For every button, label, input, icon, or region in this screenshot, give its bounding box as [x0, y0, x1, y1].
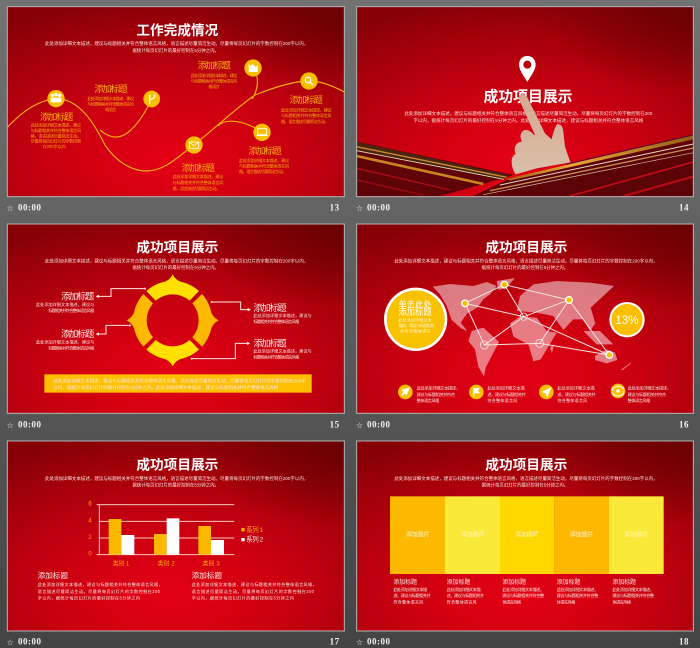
text block: upper left	[36, 290, 95, 313]
text block: column 3	[502, 578, 544, 604]
text block: item 3: 此处添加详细文本描述，建议	[191, 72, 238, 78]
text block: column 5: 建议与标题相关并符合整	[612, 592, 654, 598]
text block: item 2	[87, 83, 135, 112]
callout circle: 添加标题	[398, 307, 432, 317]
footer: ☆	[7, 204, 14, 213]
icon: refresh eye	[611, 384, 625, 398]
text block: item 1: 添加标题	[40, 111, 73, 122]
network lines	[465, 285, 609, 355]
callout circle: 单击此处	[398, 299, 432, 309]
text block: item 5: 与标题相关并符合整体语言风	[239, 162, 290, 168]
text block: column 2: 添加标题	[447, 578, 470, 586]
image placeholder blocks: 添加图片	[515, 531, 539, 539]
text block: item 1: 此处添加详细文本描述，建议	[31, 121, 82, 127]
text block: feature 4: 整体语言风格	[628, 397, 651, 403]
icon: flag	[469, 385, 484, 399]
text block: feature 1: 建议与标题相关并符合	[417, 391, 456, 397]
panel: slide 14 hand pointing	[356, 7, 693, 213]
text block: column 1: 符合整体语言风	[393, 598, 424, 604]
text block: item 1	[31, 111, 82, 149]
bar chart: 类别 1	[113, 559, 130, 567]
intro text: 据统计每页幻灯片的最好控制在5分钟之内。	[132, 264, 219, 271]
text block: column 4: 体语言风格	[557, 598, 576, 604]
text block: column 1: 述，建议与标题相关并	[393, 592, 431, 598]
bar chart: 2	[88, 535, 92, 541]
footer: 14	[679, 202, 689, 212]
text block: item 6: 添加标题	[182, 162, 215, 173]
chart legend: 系列 1	[246, 525, 264, 534]
text block: upper right	[253, 302, 312, 324]
footer	[7, 420, 340, 430]
intro text: 字以内，据统计每页幻灯片的最好控制在5分钟之内。此处添加详细文本描述，建议与标题相关并符合整体语言风格	[413, 117, 644, 124]
text block: item 4: 此处添加详细文本描述，建议	[281, 106, 332, 112]
footer: 00:00	[367, 637, 390, 647]
text block: right: 添加标题	[192, 570, 222, 580]
icon: factory	[244, 59, 262, 77]
text block: column 1: 添加标题	[393, 578, 417, 586]
title: 成功项目展示	[136, 456, 218, 472]
text block: feature 4: 此处添加详细文本描述，	[628, 384, 671, 390]
footer: 17	[330, 637, 340, 647]
panel: slide 16 world map	[356, 224, 693, 430]
image placeholder blocks: 添加图片	[570, 531, 594, 539]
bar chart: 6	[88, 502, 92, 508]
text block: column 2: 符合整体语言风	[447, 598, 477, 604]
text block: column 3: 体语言风格	[502, 598, 522, 604]
intro text: 据统计每页幻灯片的最好控制在5分钟之内。	[482, 481, 568, 488]
text block: feature 3: 此处添加详细文本描	[557, 384, 595, 390]
text block: lower right: 添加标题	[253, 337, 287, 348]
callout bar: 此处添加详细文本描述，建议与标题相关并符合整体语言风格，语言描述尽量简洁生动。尽量将每页幻灯片的字数控制在200字	[53, 377, 306, 384]
intro text	[404, 110, 653, 124]
bar chart: 类别 3	[202, 559, 220, 567]
text block: item 4: 与标题相关并符合整体语言风	[281, 112, 332, 118]
text block: item 6: 格，语言描述尽量简洁生动。	[173, 185, 220, 191]
world map	[433, 278, 632, 377]
text block: feature 2: 述，建议与标题相关并	[487, 391, 526, 397]
footer: 00:00	[367, 202, 390, 212]
text block: lower left: 标题相关并符合整体语言风格	[48, 344, 95, 350]
icon: mail	[185, 136, 203, 154]
callout bar: 以内，据统计每页幻灯片的最好控制在5分钟之内。此处添加详细文本描述，建议与标题相关并符合整体语言风格	[53, 384, 279, 391]
icon: branch	[143, 91, 160, 107]
image placeholder blocks	[390, 496, 664, 574]
text block: item 2: 格语言	[105, 106, 116, 112]
text block: column 4: 此处添加详细文本描述，	[557, 586, 598, 592]
text block: column 5: 此处添加详细文本描述，	[612, 586, 654, 592]
footer: 00:00	[18, 202, 41, 212]
callout circle: 此处添加详细文本	[398, 316, 432, 322]
text block: item 1: 与标题相关并符合整体语言风	[31, 127, 82, 133]
text block: item 4: 格，语言描述尽量简洁生动。	[281, 118, 328, 124]
footer	[356, 202, 689, 213]
panel: slide 17 bar chart	[7, 441, 344, 647]
title: 成功项目展示	[484, 88, 573, 106]
text block: left: 添加标题	[38, 570, 68, 580]
icon: search	[300, 72, 318, 90]
footer: 15	[330, 420, 340, 430]
curved timeline	[7, 68, 344, 171]
text block: column 3: 建议与标题相关并符合整	[502, 592, 544, 598]
footer	[7, 637, 340, 647]
text block: upper right: 标题相关并符合整体语言风格	[253, 318, 300, 324]
intro text: 此处添加详细文本描述，建议与标题相关并符合整体语言风格，语言描述尽量简洁生动。尽量将每页幻灯片的字数控制在200字以内，	[45, 475, 308, 482]
text block: feature 2	[487, 384, 526, 403]
text block: feature 1: 此处添加详细文本描述，	[417, 384, 460, 390]
title: 成功项目展示	[485, 456, 567, 472]
intro text	[45, 40, 308, 54]
bar chart: 4	[88, 518, 92, 524]
text block: upper left: 添加标题	[61, 290, 94, 301]
intro text: 此处添加详细文本描述，建议与标题相关并符合整体语言风格，语言描述尽量简洁生动。尽量将每页幻灯片的字数控制在200字以内，	[45, 40, 308, 47]
text block: lower right: 标题相关并符合整体语言风格	[253, 353, 300, 359]
text block: item 5: 格，语言描述尽量简洁生动。	[239, 168, 286, 174]
connector arrows	[98, 289, 249, 359]
text block: item 3: 添加标题	[198, 60, 231, 71]
text block: feature 2: 符合整体语言风	[487, 397, 518, 403]
intro text: 据统计每页幻灯片的最好控制在5分钟之内。	[132, 47, 219, 54]
footer: ☆	[356, 421, 363, 430]
text block: column 5	[612, 578, 654, 604]
text block: item 5: 添加标题	[248, 145, 282, 156]
text block: upper left: 此处添加详细文本描述，建议与	[36, 301, 94, 307]
right ribbon	[473, 135, 693, 196]
text block: lower left: 此处添加详细文本描述，建议与	[36, 338, 94, 344]
text block: item 1: 在200字以内	[43, 143, 66, 149]
text block: right: 字以内，据统计每页幻灯片的最好控制在5分钟之内	[192, 594, 294, 600]
text block: column 4	[557, 578, 598, 604]
text block: column 2: 述，建议与标题相关并	[447, 592, 484, 598]
icon: paper plane	[539, 385, 554, 399]
footer	[356, 637, 689, 647]
image placeholder blocks: 添加图片	[461, 531, 485, 539]
text block: item 1: 尽量将每页幻灯片的字数控制	[31, 137, 81, 143]
text block: feature 3: 符合整体语言风	[557, 397, 588, 403]
text block: feature 3: 述，建议与标题相关并	[557, 391, 596, 397]
text block: item 6: 与标题相关并符合整体语言风	[173, 179, 224, 185]
text block: feature 1: 整体语言风格	[417, 397, 440, 403]
text block: column 3: 此处添加详细文本描述，	[502, 586, 544, 592]
text block: left: 此处添加详细文本描述，建议与标题相关并符合整体语言风格，	[38, 581, 163, 587]
footer: 18	[679, 637, 689, 647]
text block: column 5: 体语言风格	[612, 598, 632, 604]
text block: item 6: 此处添加详细文本描述，建议	[173, 173, 224, 179]
text block: column 3: 添加标题	[502, 578, 526, 586]
text block: column 1: 此处添加详细文本描	[393, 586, 427, 592]
text block: right: 此处添加详细文本描述，建议与标题相关并符合整体语言风格，	[192, 581, 317, 587]
footer: 13	[330, 202, 340, 212]
text block: item 2: 此处添加详细文本描述，建议	[87, 95, 135, 101]
panel: slide 13 work completion curve	[7, 7, 344, 213]
bar chart	[88, 502, 234, 567]
intro text: 此处添加详细文本描述，建议与标题相关并符合整体语言风格，语言描述尽量简洁生动。尽量将每页幻灯片的字数控制在200字以内，	[45, 257, 308, 264]
text block: feature 4	[628, 384, 671, 403]
ring chart	[127, 274, 219, 366]
intro text: 此处添加详细文本描述，建议与标题相关并符合整体语言风格，语言描述尽量简洁生动。尽量将每页幻灯片的字数控制在200字以内，	[394, 257, 658, 264]
intro text	[394, 257, 658, 271]
title: 成功项目展示	[485, 239, 567, 255]
text block: column 2: 此处添加详细文本描	[447, 586, 481, 592]
text block: lower left	[36, 328, 95, 350]
panel: slide 15 ring diagram	[7, 224, 344, 430]
text block: feature 3	[557, 384, 596, 403]
footer	[356, 420, 689, 430]
text block: item 3: 格语言	[208, 83, 220, 89]
text block: item 1: 格，语言描述尽量简洁生动。	[31, 132, 81, 138]
text block: left: 语言描述尽量简洁生动。尽量将每页幻灯片的字数控制在200	[38, 588, 161, 594]
text block: upper right: 添加标题	[253, 302, 287, 313]
text block: right	[192, 570, 317, 600]
icon: rocket	[398, 385, 413, 399]
left ribbon	[357, 142, 513, 196]
text block: upper left: 标题相关并符合整体语言风格	[48, 307, 95, 313]
image placeholder blocks: 添加图片	[624, 531, 648, 539]
text block: lower right: 此处添加详细文本描述，建议与	[253, 347, 312, 353]
bar chart: 类别 2	[157, 559, 175, 567]
chart legend	[241, 525, 264, 543]
text block: column 4: 添加标题	[557, 578, 580, 586]
text block: column 2	[447, 578, 484, 604]
footer: 16	[679, 420, 689, 430]
text block: item 4	[281, 94, 332, 124]
intro text: 据统计每页幻灯片的最好控制在5分钟之内。	[132, 481, 219, 488]
intro text	[45, 475, 308, 488]
intro text: 据统计每页幻灯片的最好控制在5分钟之内。	[482, 264, 568, 271]
text block: item 5	[239, 145, 290, 174]
text block: column 5: 添加标题	[612, 578, 636, 586]
footer: ☆	[7, 638, 14, 647]
hand illustration	[512, 94, 570, 174]
percent badge: 13%	[615, 314, 639, 327]
text block: item 6	[173, 162, 224, 191]
title: 成功项目展示	[136, 239, 218, 255]
title: 工作完成情况	[136, 22, 219, 38]
text block: left	[38, 570, 163, 600]
text block: item 2: 与标题相关并符合整体语言风	[87, 100, 135, 106]
panel: slide 18 image placeholders	[356, 441, 693, 647]
text block: feature 2: 此处添加详细文本描	[487, 384, 525, 390]
footer: ☆	[7, 421, 14, 430]
text block: lower right	[253, 337, 312, 359]
icon: laptop	[253, 124, 271, 141]
text block: item 2: 添加标题	[94, 83, 128, 94]
intro text	[45, 257, 308, 271]
icon: location pin	[519, 56, 536, 82]
footer	[7, 202, 340, 213]
text block: item 5: 此处添加详细文本描述，建议	[239, 157, 290, 163]
text block: feature 1	[417, 384, 460, 403]
text block: column 1	[393, 578, 431, 604]
text block: item 4: 添加标题	[290, 94, 323, 105]
callout circle: 并符合整体语言	[400, 327, 431, 333]
text block: column 4: 建议与标题相关并符合整	[557, 592, 598, 598]
footer: ☆	[356, 638, 363, 647]
callout circle	[384, 288, 447, 351]
footer: 00:00	[18, 637, 41, 647]
icon: team	[47, 90, 65, 107]
footer: 00:00	[367, 420, 390, 430]
intro text: 此处添加详细文本描述，建议与标题相关并符合整体语言风格，语言描述尽量简洁生动。尽量将每页幻灯片的字数控制在200字以内，	[394, 475, 658, 482]
footer: ☆	[356, 204, 363, 213]
text block: lower left: 添加标题	[61, 328, 94, 339]
intro text: 此处添加详细文本描述，建议与标题相关并符合整体语言风格，语言描述尽量简洁生动。尽量将每页幻灯片的字数控制在200	[404, 110, 653, 117]
percent badge	[609, 302, 645, 337]
text block: upper right: 此处添加详细文本描述，建议与	[253, 312, 312, 318]
callout bar	[44, 374, 312, 393]
text block: item 3: 与标题相关并符合整体语言风	[191, 77, 238, 83]
map nodes	[462, 281, 613, 358]
text block: item 3	[191, 60, 238, 89]
text block: feature 4: 建议与标题相关并符合	[628, 391, 667, 397]
text block: right: 语言描述尽量简洁生动。尽量将每页幻灯片的字数控制在200	[192, 588, 315, 594]
text block: left: 字以内，据统计每页幻灯片的最好控制在5分钟之内	[38, 594, 140, 600]
intro text	[394, 475, 658, 488]
image placeholder blocks: 添加图片	[406, 531, 430, 539]
chart legend: 系列 2	[246, 534, 264, 543]
footer: 00:00	[18, 420, 41, 430]
arrowheads	[96, 288, 251, 360]
callout circle: 描述，建议与标题相关	[398, 322, 434, 328]
bar chart: 0	[88, 552, 92, 558]
